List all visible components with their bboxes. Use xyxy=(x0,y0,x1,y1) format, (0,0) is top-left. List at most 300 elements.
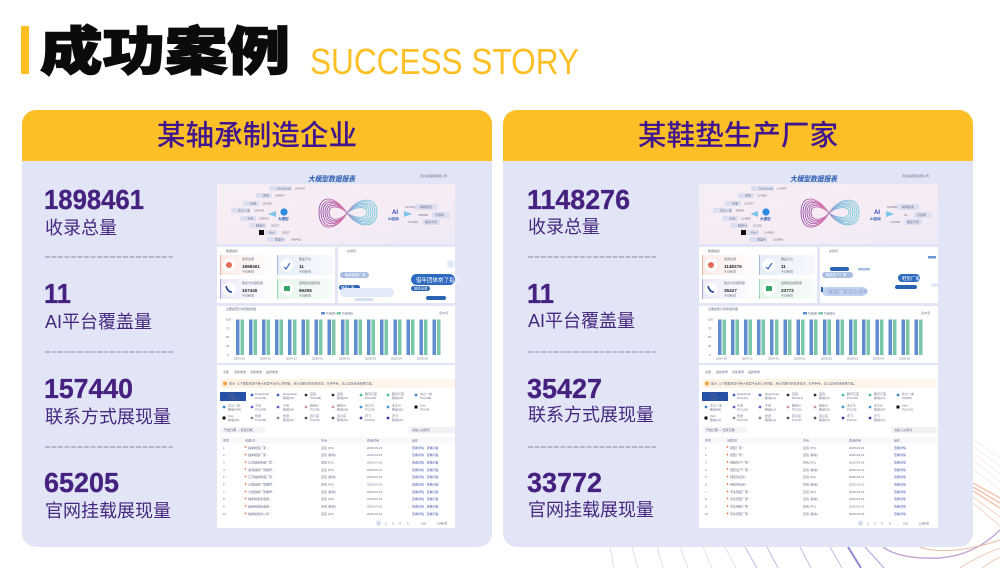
axis labels: 25 xyxy=(226,344,230,348)
results table: 查看详情 · 查看问答 xyxy=(412,511,439,516)
results table: 1 xyxy=(705,446,707,450)
card: word cloud: 关键词 xyxy=(829,248,838,253)
chart: bar chart xyxy=(217,306,455,363)
platform filter chips: PC(248) xyxy=(255,408,266,412)
results table: 大型轴承厂家推荐 ↑ xyxy=(248,489,275,494)
pagination: … xyxy=(896,522,899,526)
right platform chips: 引用率 xyxy=(917,212,926,217)
large-model icon: 大模型 xyxy=(760,216,771,221)
platform filter chips: Kimi xyxy=(902,404,908,408)
right platform chips: 34 xyxy=(904,213,908,217)
results table: 2025-03-15 xyxy=(367,453,383,457)
dashboard screenshot: right xyxy=(699,173,938,528)
metric card: platforms xyxy=(759,255,815,275)
right platform chips: 引用率 xyxy=(435,212,444,217)
platform filter chips: 天工AI xyxy=(874,404,883,408)
results table: 2025-03-15 xyxy=(849,497,865,501)
bars xyxy=(718,320,918,355)
platform filter chips: 文心一言 xyxy=(902,391,914,396)
card: word cloud: 借年团体常了指示 xyxy=(416,276,461,284)
pagination: 100 xyxy=(903,522,908,526)
left model chips: 125896 xyxy=(773,238,783,242)
platform filter chips: 智谱 xyxy=(255,413,261,418)
platform filter chips: 移动(248) xyxy=(228,406,241,412)
results table: 2025-03-15 xyxy=(367,446,383,450)
left model chips xyxy=(231,186,305,242)
card: word cloud: 关键词 xyxy=(347,248,356,253)
metric: AI platforms: 11 xyxy=(527,278,554,309)
results table: 2025-03-15 xyxy=(367,475,383,479)
left model chips: 千问 xyxy=(729,216,735,220)
platform filter chips: 全部 xyxy=(710,392,716,397)
platform filter chips: 文心一言 xyxy=(228,402,240,408)
metric card: contact: 35427 xyxy=(724,288,737,293)
platform filter chips: PC(226) xyxy=(365,396,376,400)
metric card: platforms: 今日新增 xyxy=(781,268,793,274)
platform filter chips: PC(248) xyxy=(420,396,431,400)
results table: 豆包 (PC) xyxy=(321,445,334,450)
left model chips: 114589 xyxy=(764,230,774,234)
platform filter chips: DeepSeek xyxy=(737,392,752,396)
card: word cloud: 轴承品牌 xyxy=(414,286,428,291)
results table: 豆包 (移动) xyxy=(803,511,818,516)
metric: total indexed xyxy=(44,184,144,238)
report meta: 河北某鞋垫有限公司 xyxy=(902,173,929,178)
platform filter chips: 1898461 xyxy=(228,396,240,400)
metric: website exposure: 65205 xyxy=(44,467,119,498)
left model chips: 文心一言 xyxy=(238,208,250,212)
results table: 查看详情 xyxy=(894,474,906,479)
metric card: indexed xyxy=(702,255,758,275)
results table: 轴承制造厂家 ↑ xyxy=(248,452,269,457)
metric card: platforms: 今日新增 xyxy=(299,268,311,274)
platform filter chips: Kimi xyxy=(710,414,716,418)
left model chips: 28227 xyxy=(271,224,280,228)
platform filter chips: PC(12) xyxy=(847,418,857,422)
results table: 2025-03-15 xyxy=(849,512,865,516)
left model chips: 88954 xyxy=(736,208,745,212)
platform filter chips: 百小应 xyxy=(310,413,319,418)
results table: 豆包 (移动) xyxy=(321,504,336,508)
panel: right case xyxy=(503,110,973,547)
search filters: 开始日期 — 结束日期 xyxy=(224,427,253,432)
metric: website exposure: 33772 xyxy=(527,467,602,498)
axis labels: 50 xyxy=(226,335,230,339)
axis labels: 2025-05 xyxy=(899,356,910,360)
platform filter chips: PC(20) xyxy=(792,408,802,412)
results table: 查看详情 xyxy=(894,482,906,486)
large-model icon xyxy=(750,208,771,221)
metric card: contact: 联系方式展现量 xyxy=(724,280,745,285)
results table: 鞋垫生产厂家 ↑ xyxy=(730,460,751,464)
platform filter chips: 腾讯元宝 xyxy=(847,391,859,396)
card: word cloud: 鞋垫生产厂家 xyxy=(826,272,847,277)
dashboard screenshot: left xyxy=(217,173,461,528)
platform filter chips: PC(114) xyxy=(737,408,748,412)
list panel xyxy=(217,365,455,528)
axis labels xyxy=(226,318,428,360)
right platform chips: 107156 xyxy=(405,205,415,209)
platform filter chips: PC(28) xyxy=(310,408,320,412)
metric card: contact: 今日新增 xyxy=(242,292,254,298)
metric: total indexed: 收录总量 xyxy=(45,218,117,238)
results table: 豆包 (移动) xyxy=(803,467,818,472)
metric: contact exposure: 联系方式展现量 xyxy=(528,405,654,425)
AI platform icon: AI查询 xyxy=(870,216,881,221)
platform filter chips: 移动(11) xyxy=(819,395,830,400)
pagination: … xyxy=(414,522,417,526)
left model chips: DeepSeek xyxy=(277,186,292,190)
chart: bar chart: 近30天 xyxy=(439,310,448,315)
platform filter chips: PC(24) xyxy=(310,418,320,422)
platform filter chips: Kimi xyxy=(420,404,426,408)
results table: 查看详情 · 查看问答 xyxy=(412,504,439,508)
results table: 鞋垫生产厂家 ↑ xyxy=(730,467,751,472)
chart: bar chart xyxy=(699,306,938,363)
tabs xyxy=(223,369,278,374)
metric: AI platforms: AI平台覆盖量 xyxy=(528,311,635,331)
results table: 2025-03-15 xyxy=(367,468,383,472)
AI platform icon xyxy=(388,210,412,221)
results table: 3 xyxy=(223,460,225,464)
platform filter chips: 文心一言 xyxy=(710,402,722,408)
metric card: website: 65205 xyxy=(299,288,312,293)
platform filter chips: 天工AI xyxy=(365,404,374,408)
platform filter chips: 移动(20) xyxy=(283,395,294,400)
results table: 8 xyxy=(705,497,707,501)
tabs: 全部 xyxy=(705,369,711,374)
platform filter chips: 文心一言 xyxy=(420,391,432,396)
panel heading: 某轴承制造企业 xyxy=(157,120,357,152)
metric: total indexed: 1148276 xyxy=(527,184,630,215)
left model chips: 元宝 xyxy=(250,200,256,206)
platform filter chips: 讯飞 xyxy=(874,413,880,418)
left model chips xyxy=(713,186,787,242)
results table: 豆包 (移动) xyxy=(803,482,818,486)
results table: 10 xyxy=(222,512,226,516)
right platform chips: 联系方式 xyxy=(907,219,919,224)
results table: 查看详情 · 查看问答 xyxy=(412,445,439,450)
pagination: 10条/页 xyxy=(437,520,447,526)
axis labels: 2025-05 xyxy=(417,356,428,360)
platform filter chips: 纳米AI xyxy=(819,402,828,408)
platform filter chips: 千问 xyxy=(283,402,289,408)
results table: 6 xyxy=(223,482,225,486)
left model chips: 114895 xyxy=(757,194,767,198)
chart: bar chart: 近30天 xyxy=(921,310,930,315)
results table: 豆包 (PC) xyxy=(803,489,816,494)
pagination: 5 xyxy=(407,522,409,526)
metric card: website: 今日新增 xyxy=(299,292,311,298)
platform filter chips: DeepSeek xyxy=(255,392,270,396)
left model chips: 百度AI xyxy=(275,236,284,242)
left model chips: DeepSeek xyxy=(759,186,774,190)
results table: 查看详情 · 查看问答 xyxy=(412,489,439,494)
platform filter chips: 移动(20) xyxy=(874,406,885,412)
pagination: 10条/页 xyxy=(919,520,929,526)
metric card: platforms xyxy=(277,255,333,275)
platform filter chips: 移动(11) xyxy=(765,417,776,422)
axis labels: 2024-11 xyxy=(742,356,753,360)
pagination: 3 xyxy=(392,522,394,526)
results table: 2 xyxy=(705,453,707,457)
pagination: 5 xyxy=(889,522,891,526)
results table: 5 xyxy=(705,475,707,479)
platform filter chips: 豆包 xyxy=(337,391,343,396)
platform filter chips: 纳米AI xyxy=(310,402,319,408)
tabs: 最新收录 xyxy=(716,369,728,374)
left model chips: 248749 xyxy=(254,208,264,212)
platform filter chips: 豆包 xyxy=(792,391,798,396)
large-model icon xyxy=(268,208,289,221)
platform filter chips: 移动(12) xyxy=(874,417,885,422)
notice bar: 提示: 以下数据来源于各大模型平台的公开回答，统计周期内的收录情况，仅供参考，请以实际查询结果为准。 xyxy=(711,380,857,386)
platform filter chips xyxy=(702,391,914,422)
platform filter chips: 移动(12) xyxy=(819,417,830,422)
AI platform icon xyxy=(870,210,894,221)
hero banner xyxy=(699,184,938,244)
card: word cloud: 轴承厂家 xyxy=(341,284,355,290)
panel background xyxy=(22,110,492,547)
platform filter chips: 移动(24) xyxy=(337,395,348,400)
results table: 2025-03-15 xyxy=(849,446,865,450)
metric: contact exposure xyxy=(527,373,654,425)
pagination: 1 xyxy=(378,522,380,526)
tabs: 品牌收录 xyxy=(266,369,278,374)
platform filter chips: 讯飞 xyxy=(847,413,853,418)
notice bar: 提示: 以下数据来源于各大模型平台的公开回答，统计周期内的收录情况，仅供参考，请以实际查询结果为准。 xyxy=(229,380,375,386)
results table: 序号 xyxy=(705,438,711,442)
results table: 豆包 (PC) xyxy=(803,445,816,450)
platform filter chips: 天工AI xyxy=(392,404,401,408)
infinity graphic xyxy=(801,199,859,227)
metric: AI platforms: 11 xyxy=(44,278,71,309)
panel header band xyxy=(503,110,973,161)
metric: AI platforms xyxy=(527,278,635,331)
results table: 2025-03-15 xyxy=(849,490,865,494)
platform filter chips: PC(88) xyxy=(902,396,912,400)
platform filter chips: PC(12) xyxy=(792,418,802,422)
results table: 轴承制造商选择 ↑ xyxy=(248,496,272,501)
results table: 轴承制造厂家 ↑ xyxy=(248,445,269,450)
axis labels: 2024-12 xyxy=(286,356,297,360)
axis labels: 25 xyxy=(708,344,712,348)
platform filter chips: 千问 xyxy=(737,402,743,408)
axis labels: 2025-04 xyxy=(391,356,402,360)
tabs xyxy=(705,369,760,374)
report title: 大模型数据报表 xyxy=(308,174,356,184)
results table: 7 xyxy=(705,490,707,494)
results table: 7 xyxy=(223,490,225,494)
axis labels: 2024-11 xyxy=(260,356,271,360)
right platform chips xyxy=(887,204,932,225)
metric card: platforms: 11 xyxy=(299,264,304,269)
pagination: 2 xyxy=(867,522,869,526)
axis labels: 2025-03 xyxy=(847,356,858,360)
left model chips: 248463 xyxy=(259,216,269,220)
metric: contact exposure: 联系方式展现量 xyxy=(45,407,171,427)
results table: 操作 xyxy=(412,438,418,442)
axis labels: 0 xyxy=(227,353,229,357)
platform filter chips: 腾讯元宝 xyxy=(365,391,377,396)
platform filter chips: 智谱 xyxy=(283,413,289,418)
results table: 查看详情 · 查看问答 xyxy=(412,460,439,464)
results table: 4 xyxy=(705,468,707,472)
results table: 查看详情 xyxy=(894,467,906,472)
card: data metrics: 数据指标 xyxy=(226,248,238,253)
results table: 查询时间 xyxy=(849,438,861,442)
platform filter chips: 腾讯元宝 xyxy=(392,391,404,396)
metric card: platforms: 覆盖平台 xyxy=(781,256,793,261)
results table: 3 xyxy=(705,460,707,464)
results table: 2025-03-15 xyxy=(849,460,865,464)
left model chips: 28227 xyxy=(282,230,291,234)
metric card: indexed: 今日新增 xyxy=(242,268,254,274)
platform filter chips: PC(28) xyxy=(420,408,430,412)
platform filter chips: 全部 xyxy=(228,392,234,397)
platform filter chips: PC(28) xyxy=(365,408,375,412)
axis labels: 75 xyxy=(226,326,230,330)
search filters xyxy=(221,427,455,433)
results table: 查看详情 · 查看问答 xyxy=(412,474,439,479)
tabs: 品牌收录 xyxy=(748,369,760,374)
platform filter chips: 移动(24) xyxy=(392,417,403,422)
decorative background lines xyxy=(610,440,1000,568)
platform filter chips: 千问 xyxy=(255,402,261,408)
results table: 豆包 (移动) xyxy=(321,474,336,479)
results table: 豆包 (PC) xyxy=(803,504,816,508)
bars xyxy=(236,320,436,355)
large-model icon: 大模型 xyxy=(278,216,289,221)
metric: contact exposure: 35427 xyxy=(527,373,602,404)
results table: 查看详情 xyxy=(894,504,906,508)
results table xyxy=(703,437,937,516)
platform filter chips: 腾讯元宝 xyxy=(874,391,886,396)
platform filter chips: 移动(28) xyxy=(392,406,403,412)
results table: 豆包 (PC) xyxy=(803,460,816,464)
axis labels: 2025-02 xyxy=(339,356,350,360)
search filters: 请输入关键词 xyxy=(412,427,430,432)
results table: 豆包 (移动) xyxy=(321,452,336,457)
panel: left case xyxy=(22,110,492,547)
axis labels: 2025-02 xyxy=(821,356,832,360)
left model chips: 248947 xyxy=(275,194,285,198)
platform filter chips: PC(114) xyxy=(792,396,803,400)
axis labels: 0 xyxy=(709,353,711,357)
platform filter chips: 移动(24) xyxy=(283,406,294,412)
results table: 问题/词 xyxy=(245,438,255,442)
results table: 2025-03-15 xyxy=(849,468,865,472)
metric card: indexed: 1148276 xyxy=(724,264,742,269)
panel heading: 某鞋垫生产厂家 xyxy=(638,120,838,152)
platform filter chips: DeepSeek xyxy=(283,392,298,396)
platform filter chips: 百小应 xyxy=(819,413,828,418)
left model chips: 248463 xyxy=(291,238,301,242)
axis labels: 2025-01 xyxy=(312,356,323,360)
platform filter chips: PC(114) xyxy=(737,418,748,422)
pagination: 1 xyxy=(860,522,862,526)
platform filter chips: 移动(24) xyxy=(283,417,294,422)
results table: 查看详情 · 查看问答 xyxy=(412,496,439,501)
results table: 9 xyxy=(223,504,225,508)
platform filter chips: PC(248) xyxy=(255,418,266,422)
metric: total indexed: 收录总量 xyxy=(528,217,600,237)
metric card: indexed: 收录总量 xyxy=(724,256,736,261)
results table: 豆包 (PC) xyxy=(321,511,334,516)
platform filter chips: 移动(88) xyxy=(710,406,721,412)
results table: 豆包 (PC) xyxy=(321,496,334,501)
results table: 查看详情 · 查看问答 xyxy=(412,467,439,472)
hero banner xyxy=(217,184,455,244)
results table: 鞋垫厂家 ↑ xyxy=(730,445,745,450)
left model chips: 126787 xyxy=(744,202,754,206)
left model chips: 纳米AI xyxy=(256,222,265,228)
metric card: contact: 157440 xyxy=(242,288,258,293)
main heading: 成功案例 xyxy=(40,23,290,82)
metric card: website: 今日新增 xyxy=(781,292,793,298)
card: word cloud: 鞋垫厂家 xyxy=(902,275,920,282)
platform filter chips: 移动(22) xyxy=(392,395,403,400)
left model chips: 豆包 xyxy=(745,192,751,198)
results table: 2025-03-15 xyxy=(367,504,383,508)
axis labels: 50 xyxy=(708,335,712,339)
metric card: website xyxy=(277,279,333,299)
results table: 江苏轴承制造厂家 ↑ xyxy=(248,474,275,479)
card: word cloud xyxy=(820,247,938,303)
axis labels: 2024-10 xyxy=(234,356,245,360)
legend: 引用率A xyxy=(808,310,819,316)
metric: website exposure xyxy=(44,467,171,521)
metric card: indexed: 收录总量 xyxy=(242,256,254,261)
results table: 河北鞋垫厂家 ↑ xyxy=(730,489,751,494)
left model chips: Kimi xyxy=(269,230,275,234)
platform filter chips: PC(20) xyxy=(847,408,857,412)
results table: 滚动轴承厂家推荐 ↑ xyxy=(248,467,275,472)
card: data metrics xyxy=(217,247,335,303)
results table: 9 xyxy=(705,504,707,508)
axis labels: 75 xyxy=(708,326,712,330)
metric: total indexed xyxy=(527,184,630,237)
legend: 引用率B xyxy=(342,310,353,316)
results table: 2025-03-15 xyxy=(367,490,383,494)
axis labels: 2024-10 xyxy=(716,356,727,360)
results table: 查看详情 xyxy=(894,452,906,457)
panel header band xyxy=(22,110,492,161)
metric: website exposure: 官网挂载展现量 xyxy=(45,501,171,521)
metric: contact exposure: 157440 xyxy=(44,373,133,404)
results table: 查看详情 · 查看问答 xyxy=(412,452,439,457)
platform filter chips: DeepSeek xyxy=(765,392,780,396)
results table: 2025-03-15 xyxy=(367,497,383,501)
AI platform icon: AI xyxy=(874,210,880,216)
right platform chips: 171906 xyxy=(408,220,418,224)
english subtitle: SUCCESS STORY xyxy=(310,41,579,82)
metric card: platforms: 11 xyxy=(781,264,786,269)
platform filter chips: Kimi xyxy=(228,414,234,418)
platform filter chips: PC(24) xyxy=(365,418,375,422)
pagination: 3 xyxy=(874,522,876,526)
axis labels: 2024-12 xyxy=(768,356,779,360)
results table: 2025-03-15 xyxy=(367,482,383,486)
metric card: contact xyxy=(220,279,276,299)
left model chips: 文心一言 xyxy=(720,208,732,212)
results table: 2 xyxy=(223,453,225,457)
results table: 2025-03-15 xyxy=(367,512,383,516)
axis labels xyxy=(708,318,910,360)
pagination xyxy=(858,520,929,526)
right platform chips: 联系方式 xyxy=(425,219,437,224)
platform filter chips: 讯飞 xyxy=(392,413,398,418)
